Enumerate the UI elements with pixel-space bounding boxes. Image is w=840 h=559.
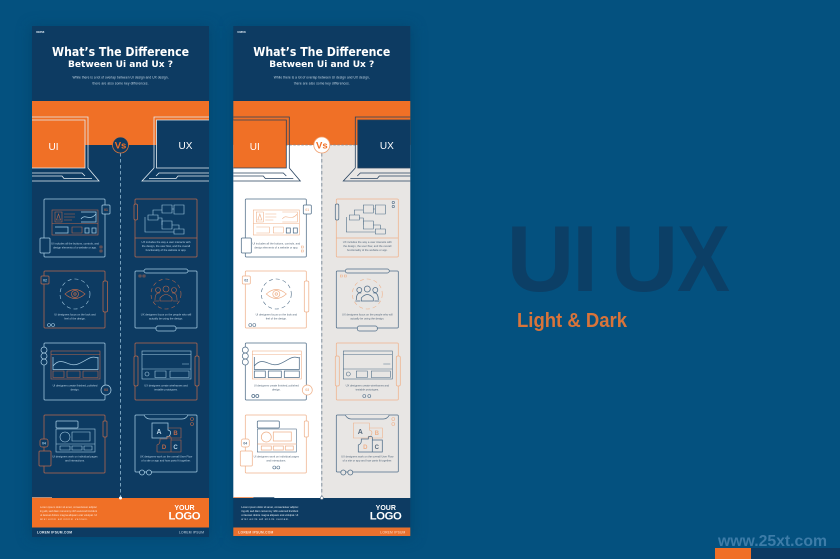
subheading: Light & Dark: Light & Dark (517, 310, 628, 332)
title: Between Ui and Ux ? (269, 60, 374, 70)
card 1: UI elements: UI includes all the buttons, controls, and (51, 242, 99, 246)
footer: LOREM IPSUM.COM (238, 530, 274, 534)
card 8: UX user flow puzzle: D (363, 445, 368, 451)
card 8: UX user flow puzzle: UX designers work on the overall User Flow (140, 454, 192, 458)
laptop: UX: UX (380, 141, 394, 152)
card 4: UX people (135, 269, 197, 331)
card 5: UI polished design: 03 (104, 388, 108, 392)
card 3: UI look and feel: 02 (244, 278, 248, 282)
card 2: UX flow: functionality of the website or app. (347, 248, 388, 252)
card 8: UX user flow puzzle: D (162, 445, 167, 451)
orange band (32, 101, 209, 145)
card 8: UX user flow puzzle: A (156, 429, 162, 436)
card 6: UX wireframes (335, 343, 400, 400)
card 2: UX flow (134, 199, 197, 257)
poster tag: 00858 (36, 30, 45, 34)
card 3: UI look and feel: feel of the design. (64, 316, 86, 320)
card 6: UX wireframes: testable prototypes. (356, 388, 379, 392)
footer: ut laoreet dolore magna aliquam erat volutpat. Ut (40, 513, 97, 517)
card 3: UI look and feel: feel of the design. (266, 316, 287, 320)
footer: LOREM IPSUM (380, 530, 406, 534)
footer: LOREM IPSUM (179, 530, 204, 534)
vs badge: Vs (115, 140, 126, 152)
footer (233, 496, 410, 536)
card 1: UI elements: UI includes all the buttons, controls, and (252, 242, 301, 246)
card 8: UX user flow puzzle: of a site or app and how parts fit together. (343, 458, 392, 462)
subtitle: there are also some key differences. (92, 82, 149, 86)
watermark: www.25xt.com (717, 533, 827, 550)
card 7: UI pages: 04 (42, 441, 46, 445)
card 7: UI pages: 04 (243, 441, 247, 445)
card 3: UI look and feel: UI designers focus on the look and (256, 312, 297, 316)
laptop: UX: UX (179, 141, 193, 152)
footer: YOUR (174, 505, 195, 512)
subtitle (72, 76, 169, 86)
card 1: UI elements: 01 (104, 208, 108, 212)
card 7: UI pages: and interactions. (65, 458, 85, 462)
card 2: UX flow (335, 199, 398, 257)
card 5: UI polished design (242, 343, 312, 400)
card 4: UX people: actually be using the design. (149, 316, 183, 320)
card 6: UX wireframes: UX designers create wireframes and (346, 384, 390, 388)
card 8: UX user flow puzzle: C (173, 445, 178, 451)
watermark (715, 533, 840, 559)
card 5: UI polished design: 03 (305, 388, 309, 392)
card 3: UI look and feel (41, 271, 108, 328)
orange band (233, 101, 410, 145)
card 7: UI pages (240, 415, 308, 473)
card 2: UX flow: the design, the user flow, and the overall (142, 244, 190, 248)
subtitle: there are also some key differences. (294, 82, 350, 86)
vs badge (112, 137, 128, 153)
card 8: UX user flow puzzle: B (375, 431, 380, 437)
card 8: UX user flow puzzle: C (375, 445, 380, 451)
card 6: UX wireframes (134, 343, 199, 400)
card 4: UX people (336, 269, 398, 331)
card 8: UX user flow puzzle: A (358, 429, 363, 436)
footer: ing elit, sed diam nonummy nibh euismod tincidunt (40, 509, 97, 513)
card 6: UX wireframes: UX designers create wireframes and (144, 384, 188, 388)
card 5: UI polished design: UI designers create finished, polished (254, 384, 299, 388)
subtitle: While there is a lot of overlap between UI design and UX design, (72, 76, 169, 80)
title: Between Ui and Ux ? (68, 60, 173, 70)
poster tag: 00858 (237, 30, 246, 34)
card 3: UI look and feel: UI designers focus on the look and (54, 312, 96, 316)
laptop: UI: UI (250, 142, 260, 153)
card 2: UX flow: functionality of the website or app. (146, 248, 187, 252)
footer: wisi enim ad minim veniam. (40, 517, 88, 521)
card 8: UX user flow puzzle (135, 415, 197, 475)
heading: UI UX (506, 206, 730, 311)
card 8: UX user flow puzzle: of a site or app and how parts fit together. (141, 458, 191, 462)
card 1: UI elements (40, 199, 110, 257)
card 8: UX user flow puzzle (336, 415, 398, 475)
card 7: UI pages (39, 415, 107, 473)
card 3: UI look and feel (242, 271, 309, 328)
heading: UI UX: U (610, 206, 678, 311)
card 3: UI look and feel: 02 (43, 278, 47, 282)
center divider (321, 153, 323, 497)
laptop: UI (32, 117, 99, 181)
footer: wisi enim ad minim veniam. (241, 517, 290, 521)
card 7: UI pages: UI designers work on individual pages (254, 454, 300, 458)
card 2: UX flow: UX includes the way a user interacts with (343, 240, 392, 244)
center divider (120, 153, 122, 497)
vs badge: Vs (316, 140, 328, 152)
card 7: UI pages: and interactions. (266, 458, 286, 462)
subtitle (274, 76, 370, 86)
card 6: UX wireframes: testable prototypes. (154, 388, 178, 392)
laptop: UI (233, 117, 300, 181)
card 8: UX user flow puzzle: UX designers work on the overall User Flow (341, 454, 393, 458)
panel: dark version poster (32, 26, 209, 537)
footer: ing elit, sed diam nonummy nibh euismod tincidunt (241, 509, 299, 513)
footer: LOREM IPSUM.COM (37, 530, 72, 534)
footer: LOGO (168, 510, 201, 522)
card 2: UX flow: UX includes the way a user interacts with (142, 240, 191, 244)
card 5: UI polished design: UI designers create finished, polished (53, 384, 98, 388)
heading: UI UX: U (506, 206, 574, 311)
heading: UI UX: I (572, 206, 598, 311)
title: What’s The Difference (52, 44, 189, 59)
card 2: UX flow: the design, the user flow, and the overall (343, 244, 392, 248)
footer: YOUR (376, 505, 396, 512)
heading: UI UX: X (677, 206, 730, 311)
card 1: UI elements: design elements of a website or app. (53, 246, 97, 250)
footer: Lorem ipsum dolor sit amet, consectetuer adipisc (40, 505, 98, 509)
footer: ut laoreet dolore magna aliquam erat volutpat. Ut (241, 513, 299, 517)
title (253, 44, 390, 70)
card 4: UX people: UX designers focus on the people who will (141, 312, 192, 316)
title (52, 44, 189, 70)
footer: Lorem ipsum dolor sit amet, consectetuer adipisc (241, 505, 299, 509)
card 5: UI polished design: design. (71, 388, 80, 392)
laptop: UX (142, 117, 209, 181)
card 5: UI polished design: design. (272, 388, 281, 392)
card 1: UI elements: 01 (305, 208, 309, 212)
card 1: UI elements (241, 199, 311, 257)
card 7: UI pages: UI designers work on individual pages (52, 454, 98, 458)
footer (32, 496, 209, 534)
laptop: UI: UI (48, 142, 58, 153)
card 1: UI elements: design elements of a website or app. (254, 246, 298, 250)
title: What’s The Difference (253, 44, 390, 59)
footer: LOGO (370, 510, 402, 522)
card 8: UX user flow puzzle: B (173, 431, 178, 437)
card 5: UI polished design (41, 343, 111, 400)
panel: light version poster (233, 26, 410, 536)
card 4: UX people: actually be using the design. (350, 316, 385, 320)
subtitle: While there is a lot of overlap between UI design and UX design, (274, 76, 370, 80)
laptop: UX (343, 117, 410, 181)
card 4: UX people: UX designers focus on the people who will (342, 312, 393, 316)
vs badge (314, 137, 330, 153)
